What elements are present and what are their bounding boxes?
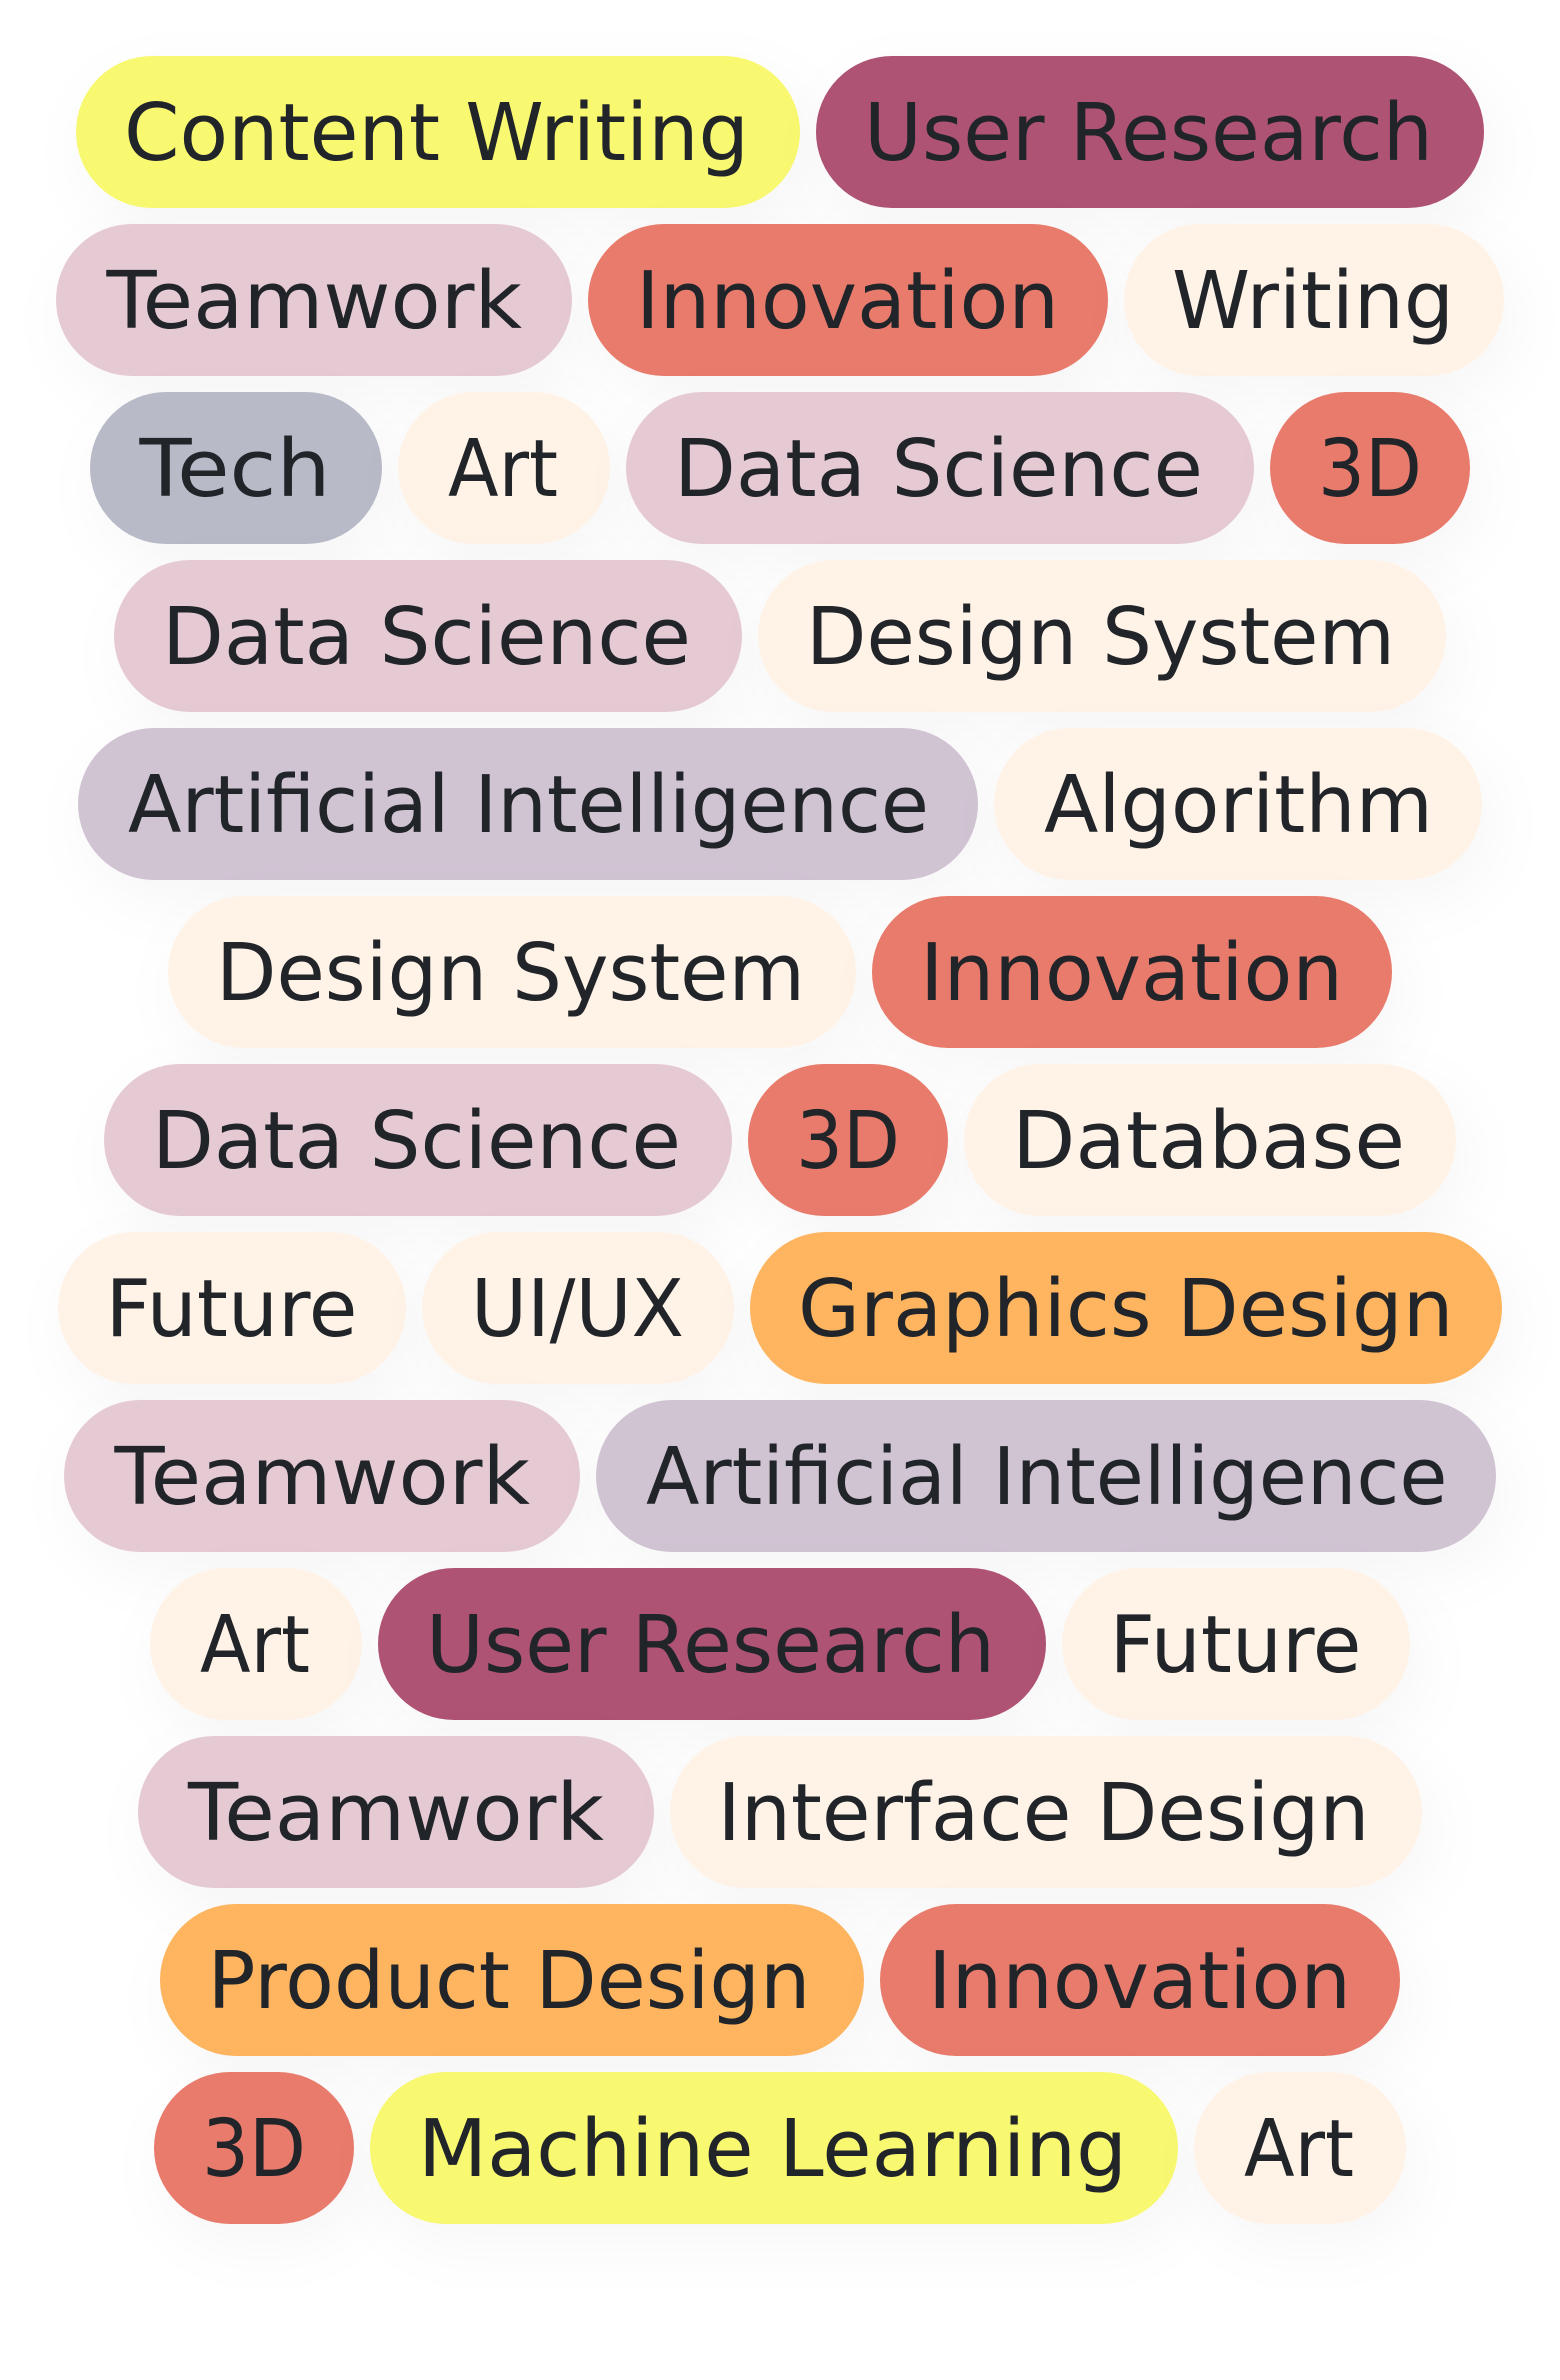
- tag: Art: [150, 1568, 362, 1720]
- tag: Art: [1194, 2072, 1406, 2224]
- tag: Data Science: [626, 392, 1254, 544]
- tag: UI/UX: [422, 1232, 734, 1384]
- tag: Writing: Writing: [1172, 255, 1454, 347]
- tag: Teamwork: Teamwork: [113, 1431, 530, 1523]
- tag: Data Science: [104, 1064, 732, 1216]
- tag: Writing: [1124, 224, 1504, 376]
- tag: Teamwork: [56, 224, 572, 376]
- tag: Artificial Intelligence: [596, 1400, 1496, 1552]
- tag: Innovation: [880, 1904, 1400, 2056]
- tag: Artificial Intelligence: [78, 728, 978, 880]
- tag: Algorithm: [994, 728, 1482, 880]
- tag: Interface Design: Interface Design: [718, 1767, 1370, 1859]
- tag: Content Writing: [76, 56, 800, 208]
- tag: Future: Future: [1110, 1599, 1362, 1691]
- tag: Innovation: [588, 224, 1108, 376]
- tag: Teamwork: [138, 1736, 654, 1888]
- tag: Data Science: Data Science: [152, 1095, 681, 1187]
- tag: Innovation: Innovation: [928, 1935, 1351, 2027]
- tag: User Research: User Research: [426, 1599, 995, 1691]
- tag: Art: [398, 392, 610, 544]
- tag: Graphics Design: [750, 1232, 1502, 1384]
- tag: UI/UX: UI/UX: [471, 1263, 684, 1355]
- tag: Innovation: [872, 896, 1392, 1048]
- tag: 3D: 3D: [796, 1095, 900, 1187]
- tag: Product Design: [160, 1904, 864, 2056]
- tag: Content Writing: Content Writing: [124, 87, 749, 179]
- tag: Tech: [90, 392, 382, 544]
- tag: 3D: 3D: [1318, 423, 1422, 515]
- tag: User Research: [816, 56, 1484, 208]
- tag: Machine Learning: [370, 2072, 1178, 2224]
- tag: Teamwork: Teamwork: [187, 1767, 604, 1859]
- tag: Design System: Design System: [806, 591, 1395, 683]
- tag: Design System: [168, 896, 856, 1048]
- tag: User Research: User Research: [864, 87, 1433, 179]
- tag: Tech: Tech: [138, 423, 330, 515]
- tag: Future: [58, 1232, 406, 1384]
- tag: Art: Art: [448, 423, 558, 515]
- tag: Database: [964, 1064, 1456, 1216]
- tag: 3D: [154, 2072, 354, 2224]
- tag: Artificial Intelligence: Artificial Intelligence: [646, 1431, 1448, 1523]
- tag: Art: Art: [200, 1599, 310, 1691]
- tag: 3D: 3D: [202, 2103, 306, 2195]
- tag: Data Science: Data Science: [162, 591, 691, 683]
- tag: Future: Future: [106, 1263, 358, 1355]
- tag: 3D: [748, 1064, 948, 1216]
- tag: Machine Learning: Machine Learning: [418, 2103, 1127, 2195]
- tag: Interface Design: [670, 1736, 1422, 1888]
- tag: 3D: [1270, 392, 1470, 544]
- tag: Art: Art: [1244, 2103, 1354, 2195]
- tag: Database: Database: [1012, 1095, 1405, 1187]
- tag: Teamwork: Teamwork: [105, 255, 522, 347]
- tag: User Research: [378, 1568, 1046, 1720]
- tag: Graphics Design: Graphics Design: [798, 1263, 1454, 1355]
- tag: Data Science: [114, 560, 742, 712]
- tag: Innovation: Innovation: [636, 255, 1059, 347]
- tag: Teamwork: [64, 1400, 580, 1552]
- tag: Design System: [758, 560, 1446, 712]
- tag: Product Design: Product Design: [208, 1935, 810, 2027]
- tag: Design System: Design System: [216, 927, 805, 1019]
- tag: Data Science: Data Science: [674, 423, 1203, 515]
- tag: Algorithm: Algorithm: [1044, 759, 1433, 851]
- tag: Future: [1062, 1568, 1410, 1720]
- tag: Innovation: Innovation: [920, 927, 1343, 1019]
- tag: Artificial Intelligence: Artificial Intelligence: [128, 759, 929, 851]
